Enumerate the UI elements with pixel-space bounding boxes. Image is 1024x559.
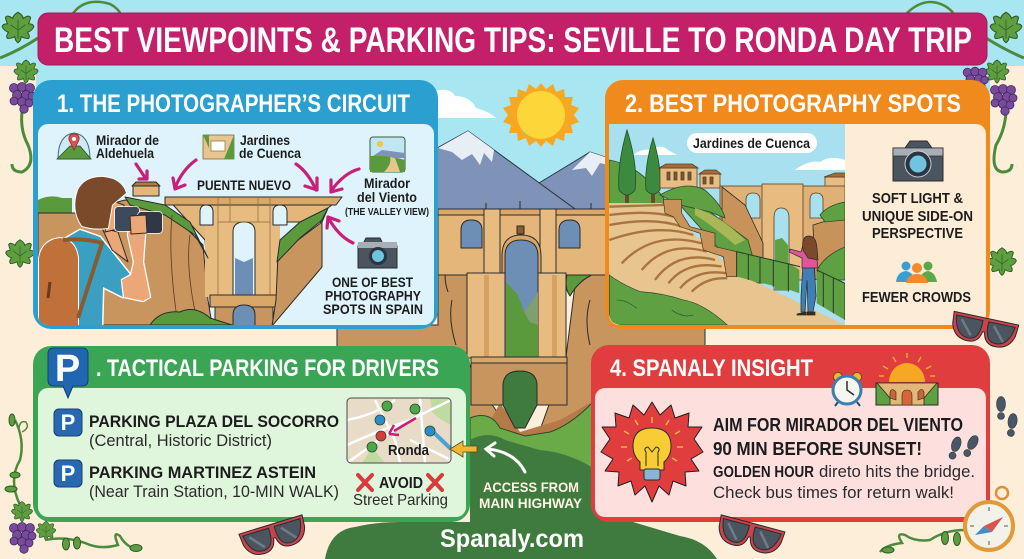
icon: valley view — [370, 137, 405, 172]
icon: sunglasses bottom left — [239, 515, 310, 559]
icon: light bulb burst — [601, 402, 703, 502]
text: soft light: UNIQUE SIDE-ON — [862, 208, 973, 225]
parking item 2: (Near Train Station, 10-MIN WALK) — [89, 482, 339, 501]
heading: panel 4: 4. SPANALY INSIGHT — [610, 355, 813, 382]
text: Jardines de Cuenca: Jardines — [240, 132, 290, 148]
icon: leaf left — [6, 240, 34, 267]
map: Ronda: Ronda — [388, 442, 430, 459]
icon: compass — [965, 487, 1013, 550]
text: fewer crowds: FEWER CROWDS — [862, 289, 971, 306]
panel 4: Spanaly insight — [591, 345, 990, 522]
heading: panel 2: 2. BEST PHOTOGRAPHY SPOTS — [625, 90, 961, 118]
illustration: Jardines de Cuenca view: Jardines de Cuenca — [693, 136, 810, 151]
text: Jardines de Cuenca — [203, 132, 301, 161]
text: one of best photography spots: ONE OF BEST — [332, 274, 413, 290]
panel 1: the photographer's circuit — [33, 80, 438, 329]
text: Mirador de Aldehuela: Mirador de — [96, 132, 159, 148]
icon: cloud — [430, 90, 496, 118]
heading: panel 1: 1. THE PHOTOGRAPHER’S CIRCUIT — [57, 90, 410, 118]
icon: alarm clock — [833, 372, 862, 406]
parking item 1 — [54, 409, 339, 450]
illustration: bridge and cliffs — [38, 177, 342, 327]
text: insight: AIM FOR MIRADOR DEL VIENTO — [713, 415, 963, 435]
avoid street parking: Street Parking — [353, 492, 448, 509]
central bridge: Puente Nuevo — [438, 201, 610, 428]
ground and amphitheatre — [609, 203, 845, 325]
arrows: pink pointers — [136, 160, 359, 243]
avoid street parking: AVOID — [379, 475, 423, 492]
icon: camera large — [893, 141, 943, 181]
text: one of best photography spots — [323, 274, 423, 317]
icon: people — [896, 262, 937, 283]
woman visitor — [789, 236, 818, 315]
parking item 2: PARKING MARTINEZ ASTEIN — [89, 463, 316, 482]
text: insight: GOLDEN HOUR — [713, 464, 814, 481]
text: insight: direto hits the bridge. — [819, 462, 975, 481]
text: Mirador del Viento: (THE VALLEY VIEW) — [345, 207, 429, 218]
text: access from main highway — [479, 479, 583, 511]
icon: leaf right — [988, 248, 1016, 275]
mountains — [430, 131, 608, 209]
brand: Spanaly.com: Spanaly.com — [440, 525, 584, 553]
parking item 1: PARKING PLAZA DEL SOCORRO — [89, 412, 339, 431]
background: sky — [0, 0, 1024, 260]
panel 2: best photography spots — [605, 80, 990, 329]
text: Mirador del Viento: Mirador — [364, 175, 410, 191]
top-right vine — [906, 2, 1024, 172]
text: one of best photography spots: PHOTOGRAPHY — [325, 288, 422, 304]
bridge — [720, 186, 845, 246]
text: Mirador del Viento: del Viento — [357, 189, 417, 205]
label: Puente Nuevo: PUENTE NUEVO — [197, 177, 291, 193]
map: Ronda — [347, 398, 451, 463]
bottom-left vine — [5, 414, 142, 553]
text: Jardines de Cuenca: de Cuenca — [239, 145, 301, 161]
text: insight: Check bus times for return walk! — [713, 483, 954, 502]
text: insight — [713, 415, 975, 502]
icon: footprints right — [996, 396, 1018, 437]
text: Mirador de Aldehuela — [57, 132, 159, 161]
parking item 2 — [54, 460, 339, 501]
icon: sun — [503, 83, 579, 147]
text: Mirador de Aldehuela: Aldehuela — [96, 145, 154, 161]
icon: footprints in panel — [947, 434, 980, 460]
text: access from main highway: ACCESS FROM — [483, 479, 579, 495]
icon: parking pin — [48, 348, 88, 398]
railing — [737, 252, 799, 293]
icon: parking pin: P — [55, 348, 80, 390]
illustration: photographer — [39, 177, 162, 325]
text: one of best photography spots: SPOTS IN SPAIN — [323, 301, 423, 317]
cliffs and greens — [722, 187, 763, 283]
text: soft light — [862, 190, 973, 242]
icon: sunglasses bottom right — [715, 515, 785, 557]
bottom-right vine — [880, 530, 965, 553]
icon: sunglasses upper right — [949, 311, 1019, 351]
panel 3: tactical parking — [33, 346, 470, 522]
text: soft light: SOFT LIGHT & — [872, 190, 963, 207]
text: access from main highway: MAIN HIGHWAY — [479, 495, 583, 511]
icon: sunset over bridge — [876, 353, 938, 405]
arrow: white highway access — [486, 443, 525, 472]
heading: panel 3: . TACTICAL PARKING FOR DRIVERS — [96, 355, 439, 382]
avoid street parking — [353, 475, 448, 509]
cliffs behind bridge — [337, 232, 705, 470]
arrow: yellow into map — [450, 441, 477, 457]
text: soft light: PERSPECTIVE — [872, 225, 963, 242]
text: insight: 90 MIN BEFORE SUNSET! — [713, 439, 922, 459]
text: Mirador del Viento — [345, 175, 429, 218]
label pill — [687, 133, 817, 153]
top-left vine — [0, 2, 122, 172]
foreground: green bushes — [325, 380, 717, 559]
parking item 1: (Central, Historic District) — [89, 431, 272, 450]
illustration: Jardines de Cuenca view — [609, 124, 846, 325]
icon: camera — [358, 238, 397, 268]
